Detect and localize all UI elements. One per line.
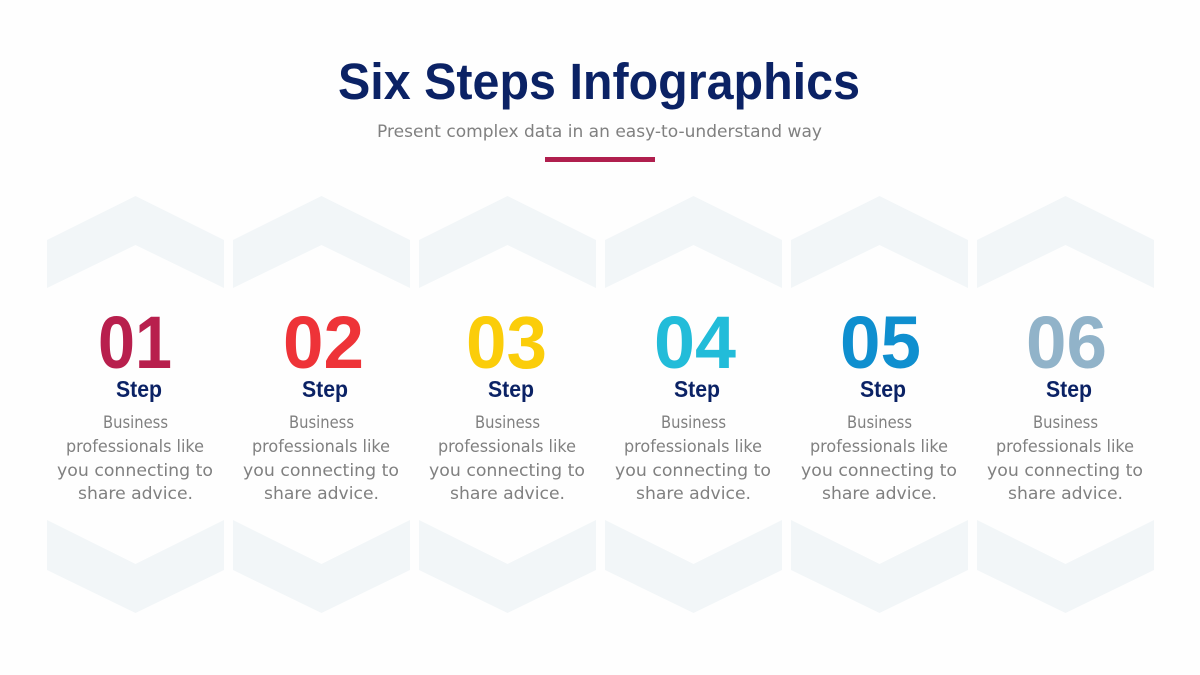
description 3: Business	[475, 413, 540, 433]
step label 6: Step	[1046, 376, 1092, 402]
description 5	[801, 413, 957, 504]
bottom chevron 1	[47, 520, 224, 613]
description 2: you connecting to	[243, 461, 399, 481]
subtitle: Present complex data in an easy-to-understand way	[377, 122, 822, 142]
description 6: you connecting to	[987, 461, 1143, 481]
description 4	[615, 413, 771, 504]
step 4 column	[605, 196, 782, 613]
number 05: 05	[840, 301, 921, 384]
step label 2: Step	[302, 376, 348, 402]
description 1	[57, 413, 213, 504]
step label 4: Step	[674, 376, 720, 402]
step 1 column	[47, 196, 224, 613]
description 3	[429, 413, 585, 504]
step 3 column	[419, 196, 596, 613]
number 06: 06	[1026, 301, 1107, 384]
top chevron 2	[233, 196, 410, 288]
description 4: Business	[661, 413, 726, 433]
step 6 column	[977, 196, 1154, 613]
bottom chevron 2	[233, 520, 410, 613]
description 5: professionals like	[810, 437, 948, 457]
step label 5: Step	[860, 376, 906, 402]
description 2: Business	[289, 413, 354, 433]
description 4: you connecting to	[615, 461, 771, 481]
description 6: Business	[1033, 413, 1098, 433]
description 2: professionals like	[252, 437, 390, 457]
description 5: Business	[847, 413, 912, 433]
title: Six Steps Infographics	[338, 53, 860, 110]
description 2: share advice.	[264, 484, 379, 504]
description 4: professionals like	[624, 437, 762, 457]
step label 3: Step	[488, 376, 534, 402]
bottom chevron 6	[977, 520, 1154, 613]
bottom chevron 3	[419, 520, 596, 613]
description 5: share advice.	[822, 484, 937, 504]
description 1: you connecting to	[57, 461, 213, 481]
number 01: 01	[98, 301, 172, 384]
step 5 column	[791, 196, 968, 613]
description 6	[987, 413, 1143, 504]
description 5: you connecting to	[801, 461, 957, 481]
step label 1: Step	[116, 376, 162, 402]
step 2 column	[233, 196, 410, 613]
top chevron 1	[47, 196, 224, 288]
bottom chevron 5	[791, 520, 968, 613]
top chevron 5	[791, 196, 968, 288]
number 04: 04	[654, 301, 736, 384]
description 4: share advice.	[636, 484, 751, 504]
description 1: professionals like	[66, 437, 204, 457]
bottom chevron 4	[605, 520, 782, 613]
description 3: you connecting to	[429, 461, 585, 481]
description 1: Business	[103, 413, 168, 433]
description 3: professionals like	[438, 437, 576, 457]
description 2	[243, 413, 399, 504]
top chevron 4	[605, 196, 782, 288]
description 1: share advice.	[78, 484, 193, 504]
number 02: 02	[283, 301, 364, 384]
number 03: 03	[466, 301, 547, 384]
top chevron 6	[977, 196, 1154, 288]
description 6: professionals like	[996, 437, 1134, 457]
description 3: share advice.	[450, 484, 565, 504]
description 6: share advice.	[1008, 484, 1123, 504]
top chevron 3	[419, 196, 596, 288]
title underline	[545, 157, 655, 162]
